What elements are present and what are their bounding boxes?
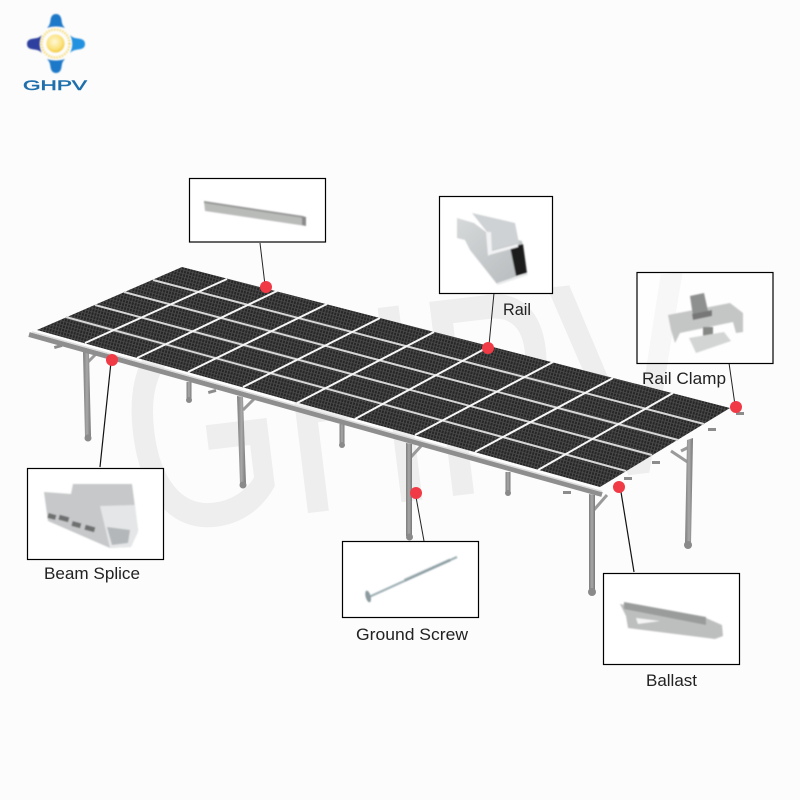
- callout: beam splice: [28, 354, 164, 583]
- rear leg stubs: [186, 382, 192, 402]
- label: Ballast: [646, 671, 697, 690]
- leader line: [260, 243, 265, 285]
- leader line: [489, 293, 494, 345]
- marker: [410, 487, 422, 499]
- marker: [482, 342, 494, 354]
- box: [604, 574, 740, 664]
- leader line: [416, 497, 424, 541]
- icon: ballast bracket: [620, 602, 723, 639]
- rail end brackets: [54, 344, 744, 494]
- callout: rail: [440, 196, 552, 354]
- icon: splice channel with bolts: [44, 484, 138, 548]
- logo wordmark: GHPV: [23, 77, 88, 93]
- leader line: [100, 362, 111, 467]
- watermark: GHPV: GHPV: [105, 213, 713, 591]
- label: Beam Splice: [44, 564, 140, 583]
- logo: GHPV: [23, 14, 88, 93]
- leader line: [729, 363, 735, 405]
- solar panel array: [29, 267, 730, 494]
- icon: clamp with bolt: [668, 293, 743, 353]
- box: [190, 178, 326, 242]
- box: [28, 468, 164, 560]
- icon: sun with four blue petals: [27, 14, 85, 73]
- marker: [730, 401, 742, 413]
- callout: beam (top): [190, 178, 326, 293]
- callout: ground screw: [342, 487, 478, 644]
- front legs: [83, 352, 91, 437]
- icon: C-channel beam: [204, 201, 306, 226]
- box: [342, 542, 478, 618]
- marker: [613, 481, 625, 493]
- label: Rail: [503, 300, 531, 319]
- label: Rail Clamp: [642, 369, 726, 388]
- columns: [85, 279, 673, 470]
- front beam: [29, 334, 602, 494]
- marker: [260, 281, 272, 293]
- callout: ballast: [604, 481, 740, 690]
- box: [440, 196, 552, 294]
- icon: rail profile: [457, 213, 528, 285]
- box: [637, 272, 773, 364]
- leader line: [621, 492, 634, 572]
- marker: [106, 354, 118, 366]
- rows: [66, 280, 704, 471]
- icon: ground screw: [364, 557, 457, 603]
- label: Ground Screw: [356, 625, 469, 644]
- braces: [86, 352, 689, 511]
- callout: rail clamp: [637, 272, 773, 413]
- mounting structure legs: [54, 344, 744, 596]
